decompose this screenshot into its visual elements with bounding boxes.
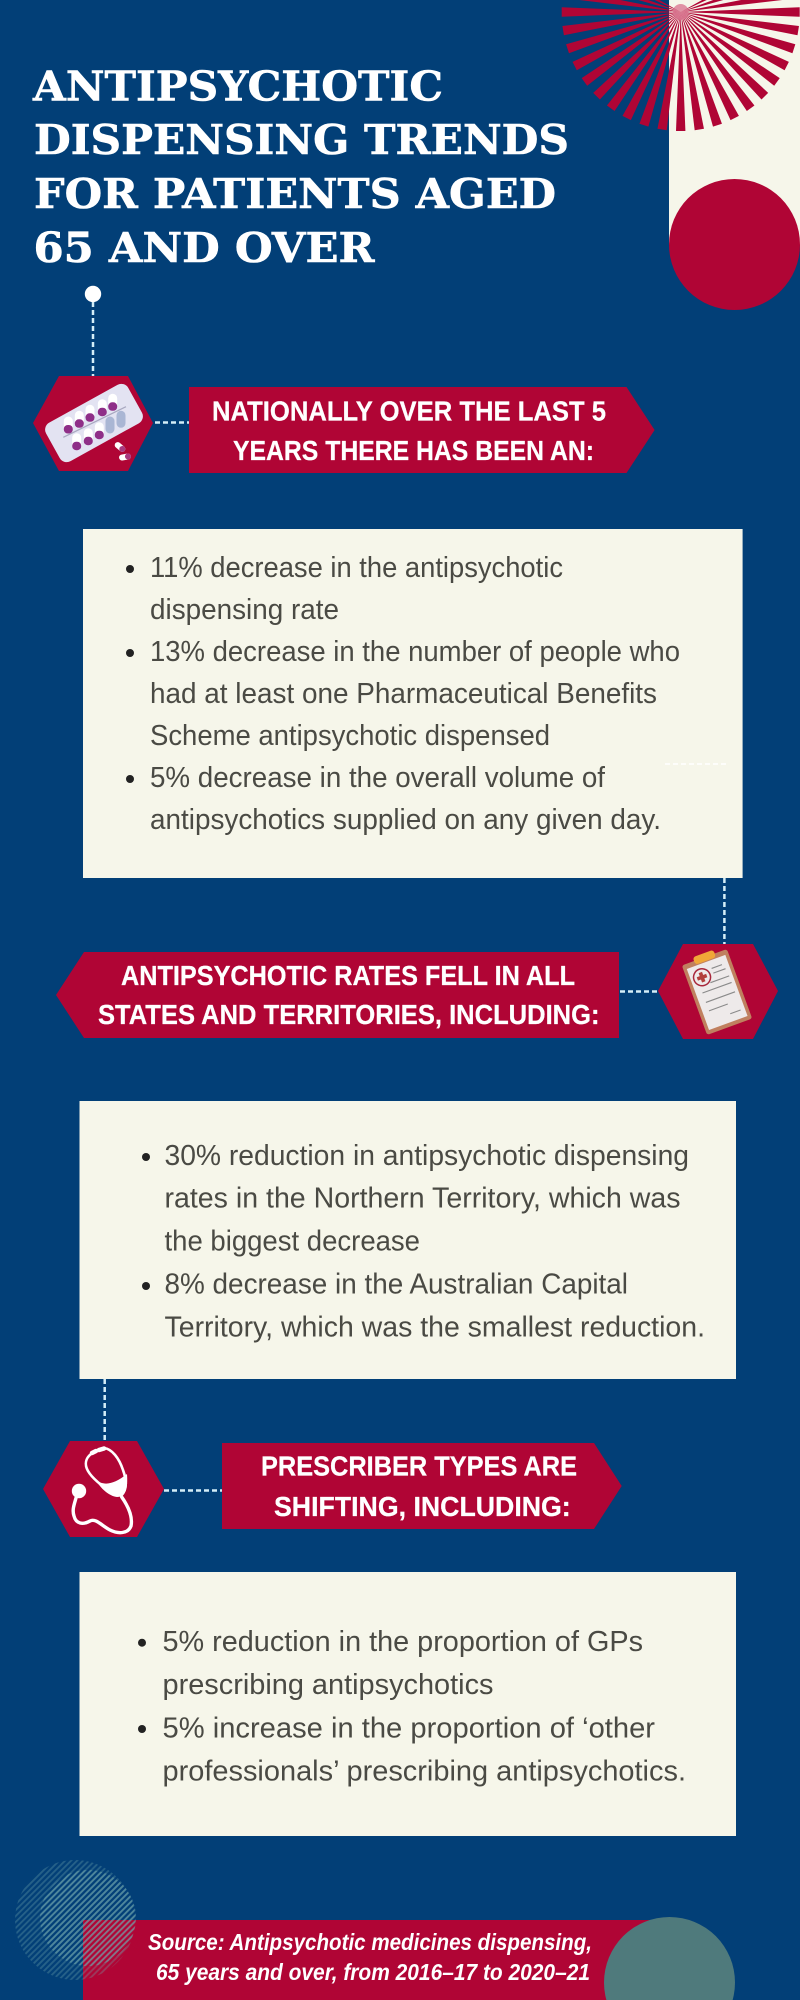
- heading: rates fell: ANTIPSYCHOTIC RATES FELL IN ALL: [121, 960, 575, 991]
- panel: states and territories: 30% reduction in antipsychotic dispensing: [164, 1140, 689, 1172]
- decoration: cream strip: [669, 0, 800, 245]
- panel: national decreases: dispensing rate: [150, 594, 339, 626]
- panel: prescriber shifts: professionals’ prescribing antipsychotics.: [162, 1755, 686, 1787]
- heading: prescriber types: [222, 1443, 622, 1529]
- panel: national decreases: antipsychotics supplied on any given day.: [150, 804, 661, 836]
- panel: national decreases: 13% decrease in the number of people who: [150, 636, 680, 668]
- decoration: sunburst: [562, 0, 800, 131]
- decoration: red circle: [669, 179, 800, 310]
- panel: states and territories: Territory, which was the smallest reduction.: [164, 1312, 705, 1344]
- title: 65 AND OVER: [34, 224, 375, 272]
- source text: Source: Antipsychotic medicines dispensing,: [148, 1929, 592, 1955]
- heading: prescriber types: SHIFTING, INCLUDING:: [274, 1491, 571, 1522]
- panel: national decreases: had at least one Pharmaceutical Benefits: [150, 678, 657, 710]
- heading: prescriber types: PRESCRIBER TYPES ARE: [261, 1451, 577, 1482]
- icon: stethoscope: [43, 1441, 164, 1537]
- connector: icon to heading 1: [155, 421, 189, 424]
- panel: states and territories: the biggest decrease: [164, 1226, 420, 1258]
- heading: nationally: YEARS THERE HAS BEEN AN:: [233, 435, 594, 466]
- title: FOR PATIENTS AGED: [34, 170, 556, 218]
- decoration: teal circle: [604, 1917, 735, 2000]
- panel: states and territories: rates in the Northern Territory, which was: [164, 1183, 680, 1215]
- panel: states and territories: 8% decrease in the Australian Capital: [164, 1269, 628, 1301]
- icon: clipboard: [658, 944, 778, 1039]
- title: ANTIPSYCHOTIC: [32, 63, 443, 111]
- connector: stethoscope to heading 3: [164, 1489, 222, 1492]
- connector: clipboard to heading 2: [620, 990, 658, 993]
- title: [32, 63, 569, 272]
- panel: prescriber shifts: 5% reduction in the proportion of GPs: [162, 1626, 643, 1658]
- connector: panel 1 to clipboard icon: [723, 878, 726, 944]
- connector: panel 2 to stethoscope icon: [103, 1379, 106, 1441]
- panel: national decreases: [83, 529, 743, 878]
- title: DISPENSING TRENDS: [34, 116, 569, 164]
- panel: prescriber shifts: prescribing antipsychotics: [162, 1669, 494, 1701]
- panel: prescriber shifts: [80, 1572, 736, 1836]
- source banner: [83, 1920, 663, 2000]
- panel: national decreases: 5% decrease in the overall volume of: [150, 762, 606, 794]
- panel: national decreases: 11% decrease in the antipsychotic: [150, 552, 563, 584]
- icon: pill blister pack: [33, 376, 153, 471]
- heading: nationally: NATIONALLY OVER THE LAST 5: [212, 396, 606, 427]
- source text: [148, 1929, 592, 1985]
- heading: rates fell: [56, 952, 619, 1038]
- heading: rates fell: STATES AND TERRITORIES, INCLUDING:: [98, 999, 600, 1030]
- heading: nationally: [189, 387, 655, 473]
- panel: states and territories: [80, 1101, 736, 1379]
- panel: national decreases: Scheme antipsychotic dispensed: [150, 720, 550, 752]
- connector: title to section 1: [85, 286, 101, 376]
- panel: prescriber shifts: 5% increase in the proportion of ‘other: [162, 1712, 655, 1744]
- source text: 65 years and over, from 2016–17 to 2020–21: [156, 1959, 590, 1985]
- decoration: striped circle: [15, 1860, 136, 1980]
